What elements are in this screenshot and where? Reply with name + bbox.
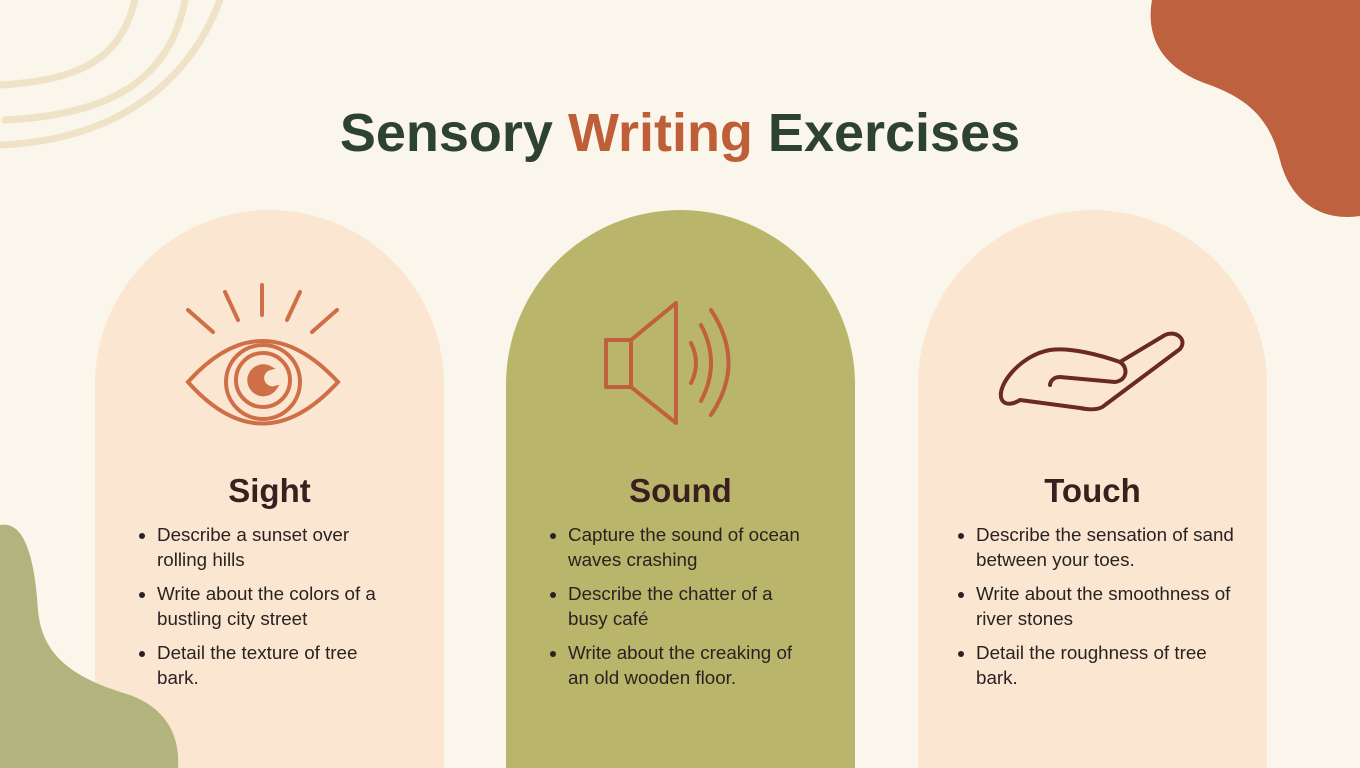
icon: eye xyxy=(185,283,341,426)
decorative swirl top-left xyxy=(0,0,224,148)
list: Describe the sensation of sand between your toes. xyxy=(976,524,1234,570)
heading: Touch xyxy=(1044,472,1141,509)
heading: Sight xyxy=(228,472,311,509)
icon: speaker xyxy=(604,300,730,425)
list xyxy=(550,524,800,688)
icon: hand xyxy=(998,332,1184,412)
panel: sight xyxy=(95,210,444,768)
list: Detail the texture of tree bark. xyxy=(157,642,357,688)
heading: Sound xyxy=(629,472,732,509)
list: Write about the colors of a bustling city street xyxy=(157,583,376,629)
panel: touch xyxy=(918,210,1267,768)
list: Write about the smoothness of river stones xyxy=(976,583,1230,629)
list: Detail the roughness of tree bark. xyxy=(976,642,1207,688)
panel: sound xyxy=(506,210,855,768)
list xyxy=(139,524,376,688)
list: Capture the sound of ocean waves crashing xyxy=(568,524,800,570)
list xyxy=(958,524,1234,688)
blob bottom-left xyxy=(0,524,178,768)
list: Describe a sunset over rolling hills xyxy=(157,524,349,570)
list: Write about the creaking of an old wooden floor. xyxy=(568,642,792,688)
title: Sensory Writing Exercises xyxy=(340,103,1020,163)
blob top-right xyxy=(1150,0,1360,217)
list: Describe the chatter of a busy café xyxy=(568,583,773,629)
